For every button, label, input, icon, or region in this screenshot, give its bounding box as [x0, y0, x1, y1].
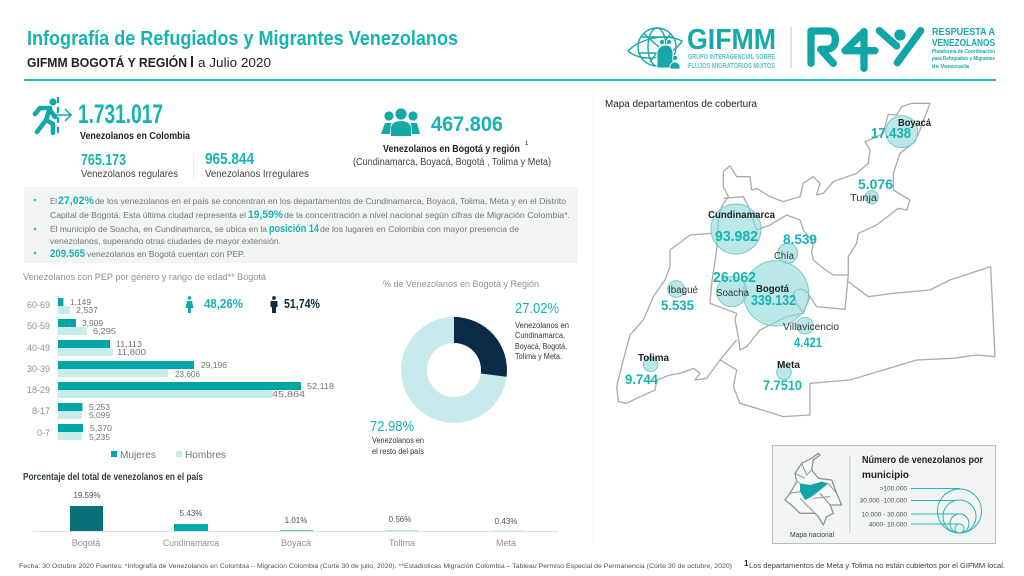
- legend: [111, 450, 226, 461]
- stat: Venezolanos en Colombia: Venezolanos Irregulares: [205, 169, 309, 180]
- bubbles: municipalities: [643, 116, 918, 380]
- map labels: Ibagué: [668, 285, 698, 296]
- bar chart: PEP by gender and age: 0-7: [37, 428, 50, 438]
- footnote: sources: Fecha: 30 Octubre 2020 Fuentes: *Infografía de Venezolanos en Colombia – Migración Colombia (Corte 30 de julio, 2020). **Estadísticas Migración Colombia – Tableau Permiso Especial de Permanencia (Corte 30 de octubre, 2020): [19, 563, 732, 570]
- footnote: coverage: Los departamentos de Meta y Tolima no están cubiertos por el GIFMM local.: [749, 563, 1005, 570]
- bar chart: PEP by gender and age: [23, 272, 334, 461]
- stat: Venezolanos en Colombia: [35, 97, 309, 180]
- column chart: percentage of all Venezuelans: Boyacá: [281, 538, 311, 548]
- size key: [911, 488, 982, 533]
- national map: [785, 453, 842, 525]
- icon: globe with people: [628, 28, 682, 69]
- stat: Venezolanos en Colombia: 1.731.017: [78, 99, 163, 129]
- panel: key facts: 209.565: [50, 248, 85, 260]
- map: departments: [617, 103, 995, 417]
- stat: Venezolanos en Bogotá y región: Venezolanos en Bogotá y región: [383, 144, 520, 155]
- subtitle: [27, 55, 271, 70]
- panel: map legend: >100.000: [880, 486, 907, 492]
- bar chart: PEP by gender and age: 18-29: [27, 385, 50, 395]
- panel: map legend: [772, 446, 996, 544]
- map labels: 26.062: [713, 269, 756, 286]
- panel: map legend: Mapa nacional: [790, 530, 834, 539]
- panel: key facts: de los lugares en Colombia con mayor presencia de: [320, 224, 519, 234]
- map labels: 5.076: [858, 176, 893, 192]
- footnote: coverage: [744, 559, 1005, 570]
- bar chart: PEP by gender and age: 1,149: [70, 297, 91, 307]
- map labels: 93.982: [715, 228, 758, 245]
- donut chart: share in Bogotá and region: 72.98%: [370, 418, 414, 435]
- donut chart: share in Bogotá and region: Venezolanos en: [515, 321, 569, 330]
- logo: R4V: RESPUESTA A: [932, 27, 995, 38]
- chart heading: Venezolanos con PEP por género y rango de edad** Bogotá: [23, 272, 267, 283]
- map labels: 4.421: [794, 334, 822, 350]
- map heading: Mapa departamentos de cobertura: [605, 99, 757, 110]
- map labels: Tunja: [850, 193, 877, 204]
- bar chart: PEP by gender and age: 52,118: [307, 381, 334, 391]
- map labels: Bogotá: [756, 284, 789, 295]
- bar chart: PEP by gender and age: 60-69: [27, 300, 50, 310]
- panel: key facts: de la concentración a nivel nacional según cifras de Migración Colombia*.: [284, 210, 570, 220]
- map labels: 9.744: [625, 371, 658, 387]
- column chart: percentage of all Venezuelans: 5.43%: [180, 509, 202, 518]
- map labels: [625, 118, 931, 393]
- panel: map legend: municipio: [862, 470, 909, 481]
- bar chart: PEP by gender and age: 2,537: [76, 305, 98, 315]
- bar chart: PEP by gender and age: 50-59: [27, 321, 50, 331]
- bar chart: PEP by gender and age: 11,800: [117, 347, 146, 357]
- icon: man: [270, 296, 278, 313]
- stat: Venezolanos en Bogotá y región: [353, 108, 551, 168]
- panel: key facts: de los venezolanos en el país se concentran en los departamentos de Cundinamarca, Boyacá, Tolima, Meta y en el Distrito: [95, 196, 566, 206]
- bar chart: PEP by gender and age: 8-17: [32, 406, 50, 416]
- column chart: percentage of all Venezuelans: Tolima: [389, 538, 415, 548]
- column chart: percentage of all Venezuelans: Meta: [496, 538, 516, 548]
- legend: Mujeres: [120, 450, 156, 461]
- subtitle: GIFMM BOGOTÁ Y REGIÓN: [27, 55, 187, 70]
- bar chart: PEP by gender and age: 5,099: [89, 410, 110, 420]
- donut chart: share in Bogotá and region: el resto del país: [372, 447, 424, 456]
- footnote: coverage: 1: [744, 559, 749, 568]
- bar chart: PEP by gender and age: 3,909: [82, 318, 103, 328]
- donut chart: share in Bogotá and region: [370, 279, 569, 456]
- stat: Venezolanos en Bogotá y región: (Cundinamarca, Boyacá, Bogotá , Tolima y Meta): [353, 157, 551, 168]
- donut chart: share in Bogotá and region: 27.02%: [515, 300, 559, 317]
- panel: key facts: El municipio de Soacha, en Cundinamarca, se ubica en la: [50, 224, 267, 234]
- map labels: 17.438: [871, 125, 911, 142]
- logo: GIFMM: FLUJOS MIGRATORIOS MIXTOS: [688, 63, 775, 70]
- panel: map legend: 10.000 - 30.000: [861, 512, 907, 518]
- chart heading: % de Venezolanos en Bogotá y Región: [383, 279, 539, 290]
- panel: key facts: El: [50, 196, 57, 206]
- chart heading: Porcentaje del total de venezolanos en el país: [23, 472, 203, 483]
- stat: Venezolanos en Bogotá y región: 467.806: [431, 113, 503, 136]
- panel: key facts: venezolanos en Bogotá cuentan con PEP.: [87, 249, 245, 259]
- map labels: 339.132: [751, 292, 796, 309]
- icon: person walking through border: [35, 97, 71, 133]
- column chart: percentage of all Venezuelans: Cundinamarca: [163, 538, 219, 548]
- logo: GIFMM: [628, 24, 776, 70]
- subtitle: a Julio 2020: [198, 55, 271, 70]
- map labels: Soacha: [716, 288, 749, 299]
- map labels: Meta: [777, 360, 800, 371]
- logo: GIFMM: GIFMM: [687, 24, 776, 56]
- bar chart: PEP by gender and age: 6,295: [93, 326, 116, 336]
- panel: map legend: 4000- 10.000: [869, 522, 907, 528]
- icon: R4V mark: [811, 29, 921, 68]
- stat: Venezolanos en Colombia: 765.173: [81, 152, 126, 169]
- column chart: percentage of all Venezuelans: 0.56%: [389, 515, 411, 524]
- stat: Venezolanos en Colombia: Venezolanos en Colombia: [80, 131, 190, 142]
- panel: key facts: 27,02%: [58, 195, 94, 207]
- panel: key facts: Capital de Bogotá. Esta última ciudad representa el: [50, 210, 246, 220]
- icon: group of people: [381, 108, 420, 136]
- gender split: women: 48,26%: [204, 296, 243, 311]
- map labels: 5.535: [661, 297, 694, 313]
- map labels: Tolima: [638, 353, 669, 364]
- stat: Venezolanos en Colombia: Venezolanos regulares: [81, 169, 178, 180]
- gender split: men: 51,74%: [284, 296, 320, 311]
- map labels: Chía: [774, 251, 794, 262]
- donut chart: share in Bogotá and region: Tolima y Meta.: [515, 352, 562, 361]
- donut chart: share in Bogotá and region: Venezolanos en: [372, 436, 424, 445]
- panel: map legend: Número de venezolanos por: [862, 455, 983, 466]
- column chart: percentage of all Venezuelans: [23, 472, 558, 548]
- bar chart: PEP by gender and age: 5,370: [90, 423, 112, 433]
- logo: R4V: [811, 27, 996, 70]
- map labels: Cundinamarca: [708, 209, 775, 221]
- gender split: women: [186, 296, 243, 313]
- icon: woman: [186, 296, 194, 313]
- logo: R4V: de Venezuela: [932, 64, 970, 70]
- column chart: percentage of all Venezuelans: 19.59%: [73, 491, 101, 500]
- stat: Venezolanos en Colombia: 965.844: [205, 151, 254, 168]
- legend: Hombres: [185, 450, 226, 461]
- logo: R4V: VENEZOLANOS: [932, 38, 995, 49]
- map labels: Boyacá: [898, 118, 931, 129]
- map labels: Villavicencio: [783, 322, 839, 333]
- gender split: men: [270, 296, 320, 313]
- bar chart: PEP by gender and age: 5,235: [89, 432, 110, 442]
- bar chart: PEP by gender and age: 40-49: [27, 343, 50, 353]
- bar chart: PEP by gender and age: 30-39: [27, 364, 50, 374]
- panel: map legend: 30.000 -100.000: [860, 498, 907, 504]
- panel: key facts: [24, 187, 578, 263]
- map labels: 8.539: [783, 231, 817, 247]
- bar chart: PEP by gender and age: 45,864: [272, 389, 305, 399]
- panel: key facts: posición 14: [269, 223, 320, 235]
- bar chart: PEP by gender and age: 5,253: [89, 402, 110, 412]
- panel: key facts: venezolanos, superando otras ciudades de mayor extensión.: [50, 236, 281, 246]
- title: Infografía de Refugiados y Migrantes Venezolanos: [27, 28, 458, 50]
- column chart: percentage of all Venezuelans: 1.01%: [285, 516, 307, 525]
- bar chart: PEP by gender and age: 23,606: [175, 369, 200, 379]
- map labels: 7.7510: [763, 377, 802, 393]
- bar chart: PEP by gender and age: 29,196: [201, 360, 227, 370]
- logo: R4V: Plataforma de Coordinación: [932, 49, 996, 55]
- column chart: percentage of all Venezuelans: 0.43%: [495, 517, 517, 526]
- bar chart: PEP by gender and age: 11,113: [116, 339, 142, 349]
- donut chart: share in Bogotá and region: Boyacá, Bogotá,: [515, 342, 567, 351]
- panel: key facts: 19,59%: [248, 209, 283, 221]
- stat: Venezolanos en Bogotá y región: 1: [525, 141, 529, 147]
- logo: GIFMM: GRUPO INTERAGENCIAL SOBRE: [688, 54, 775, 61]
- column chart: percentage of all Venezuelans: Bogotá: [72, 538, 100, 548]
- logo: R4V: para Refugiados y Migrantes: [932, 56, 995, 62]
- donut chart: share in Bogotá and region: Cundinamarca,: [515, 331, 565, 340]
